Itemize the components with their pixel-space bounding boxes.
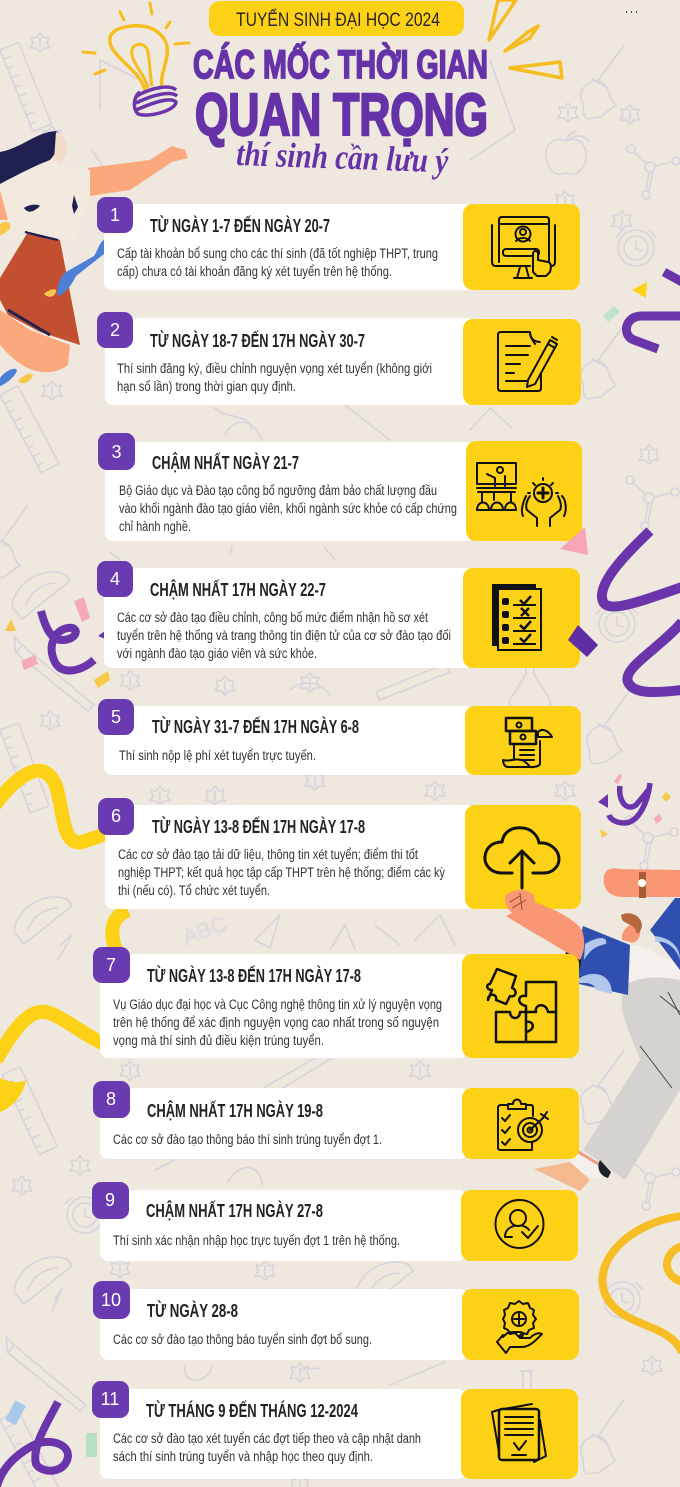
decoration: shapes — [5, 282, 671, 1457]
badge 3: 3 — [111, 442, 122, 462]
badge 4 — [97, 561, 133, 597]
skirt — [0, 232, 80, 345]
text 6: nghiệp THPT; kết quả học tập cấp THPT trên hệ thống; điểm các kỳ — [118, 865, 445, 880]
badge 10 — [93, 1281, 130, 1319]
text 11: Các cơ sở đào tạo xét tuyển các đợt tiếp theo và cập nhật danh — [113, 1431, 421, 1446]
right hand — [604, 868, 680, 897]
icon: money receipt — [503, 718, 552, 767]
hem marks — [24, 195, 78, 214]
yellow spot — [0, 222, 10, 236]
top dots — [626, 11, 637, 13]
heading 7: TỪ NGÀY 13-8 ĐẾN 17H NGÀY 17-8 — [147, 965, 361, 986]
text 1 — [117, 246, 438, 279]
text 8: Các cơ sở đào tạo thông báo thí sinh trúng tuyển đợt 1. — [113, 1132, 382, 1147]
icon: user check — [496, 1200, 544, 1248]
text 7: trên hệ thống để xác định nguyện vọng cao nhất trong số nguyện — [113, 1015, 439, 1030]
text 9: Thí sinh xác nhận nhập học trực tuyến đợt 1 trên hệ thống. — [113, 1233, 400, 1248]
heading 3: CHẬM NHẤT NGÀY 21-7 — [152, 452, 299, 473]
card 3 — [98, 433, 582, 541]
shirt — [0, 158, 90, 240]
card 9 — [92, 1182, 578, 1261]
icon: documents — [492, 1404, 546, 1462]
text 4: Các cơ sở đào tạo điều chỉnh, công bố mức điểm nhận hồ sơ xét — [117, 610, 428, 625]
arm — [88, 146, 188, 196]
left leg — [0, 310, 70, 372]
badge 11 — [92, 1381, 129, 1418]
card 10 — [93, 1281, 579, 1360]
face — [54, 132, 67, 165]
badge 7 — [93, 947, 130, 983]
heading 1: TỪ NGÀY 1-7 ĐẾN NGÀY 20-7 — [150, 215, 330, 236]
icon: document and pen — [498, 332, 557, 391]
text 3 — [119, 483, 457, 534]
icon: gear and hand — [497, 1301, 542, 1353]
heading 10: TỪ NGÀY 28-8 — [147, 1300, 238, 1321]
arm shade — [0, 190, 8, 220]
decoration: yellow strokes top right — [489, 0, 562, 78]
icon: puzzle — [487, 969, 556, 1042]
heading 2: TỪ NGÀY 18-7 ĐẾN 17H NGÀY 30-7 — [150, 330, 365, 351]
text 5: Thí sinh nộp lệ phí xét tuyển trực tuyến. — [119, 748, 316, 763]
text 2 — [117, 361, 432, 394]
text 4 — [117, 610, 451, 661]
text 1: Cấp tài khoản bổ sung cho các thí sinh (đã tốt nghiệp THPT, trung — [117, 246, 438, 261]
background doodles: ABC — [179, 911, 230, 950]
icon: light bulb — [83, 3, 189, 115]
sleeve — [565, 950, 581, 983]
subtitle pill — [209, 1, 464, 36]
decoration: purple squiggle left — [41, 611, 94, 671]
pink triangle — [560, 527, 588, 555]
badge 8 — [93, 1081, 130, 1118]
badge 7: 7 — [106, 955, 116, 975]
card 7 — [93, 947, 579, 1058]
heading 6: TỪ NGÀY 13-8 ĐẾN 17H NGÀY 17-8 — [152, 816, 365, 837]
text 3: Bộ Giáo dục và Đào tạo công bố ngưỡng đảm bảo chất lượng đầu — [119, 483, 437, 498]
heading 9: CHẬM NHẤT 17H NGÀY 27-8 — [146, 1200, 323, 1221]
decoration: purple squiggle right small — [609, 783, 650, 823]
text 4: với ngành đào tạo giáo viên và sức khỏe. — [117, 646, 317, 661]
text 4: tuyển trên hệ thống và trang thông tin điện tử của cơ sở đào tạo đối — [117, 628, 451, 643]
sock — [570, 1148, 605, 1180]
text 6: Các cơ sở đào tạo tải dữ liệu, thông tin xét tuyển; điểm thi tốt — [118, 847, 418, 862]
icon: login screen — [492, 217, 555, 278]
card 2 — [97, 312, 581, 405]
text 2: Thí sinh đăng ký, điều chỉnh nguyện vọng xét tuyển (không giới — [117, 361, 432, 376]
badge 11: 11 — [101, 1389, 119, 1409]
badge 4: 4 — [110, 569, 120, 589]
badge 3 — [98, 433, 135, 470]
text 7: vọng mà thí sinh đủ điều kiện trúng tuyển. — [113, 1033, 324, 1048]
card 8 — [93, 1081, 579, 1159]
decoration: yellow squiggle lower left — [0, 1012, 104, 1060]
text 2: hạn số lần) trong thời gian quy định. — [117, 379, 296, 394]
title line 1: CÁC MỐC THỜI GIAN — [193, 41, 488, 87]
badge 1: 1 — [110, 205, 120, 225]
header — [193, 1, 488, 180]
shoe — [534, 1162, 590, 1191]
fist — [505, 890, 535, 918]
heading 11: TỪ THÁNG 9 ĐẾN THÁNG 12-2024 — [146, 1400, 358, 1421]
text 6: thi (nếu có). Tổ chức xét tuyển. — [118, 883, 270, 898]
card 11 — [92, 1381, 578, 1479]
icon: checklist — [492, 584, 541, 650]
badge 9: 9 — [105, 1190, 115, 1210]
heading 8: CHẬM NHẤT 17H NGÀY 19-8 — [147, 1100, 323, 1121]
character: woman pointing — [0, 131, 188, 386]
text 10: Các cơ sở đào tạo thông báo tuyển sinh đợt bổ sung. — [113, 1332, 372, 1347]
badge 10: 10 — [101, 1290, 121, 1310]
subtitle pill: TUYỂN SINH ĐẠI HỌC 2024 — [236, 9, 440, 31]
badge 6 — [98, 798, 134, 835]
icon: classroom and medical hands — [477, 463, 566, 526]
heading 5: TỪ NGÀY 31-7 ĐẾN 17H NGÀY 6-8 — [152, 716, 359, 737]
icon: clipboard and target — [498, 1100, 548, 1150]
badge 5 — [98, 699, 134, 735]
arm — [506, 902, 584, 960]
trousers — [583, 977, 680, 1180]
decoration: purple squiggle right — [602, 531, 680, 692]
small pen — [0, 369, 17, 386]
text 3: chỉ hành nghề. — [119, 519, 191, 534]
watch — [638, 872, 646, 898]
shirt — [608, 945, 680, 985]
text 11 — [113, 1431, 421, 1464]
blue pen — [57, 238, 109, 296]
decoration: yellow ring right — [602, 1216, 680, 1352]
text 11: sách thí sinh trúng tuyển và nhập học theo quy định. — [113, 1449, 373, 1464]
purple bar — [568, 625, 598, 657]
icon: cloud upload — [485, 828, 559, 888]
decoration: yellow squiggle under card 6 — [112, 910, 128, 954]
text 3: vào khối ngành đào tạo giáo viên, khối ngành sức khỏe có cấp chứng — [119, 501, 457, 516]
card 5 — [98, 699, 581, 775]
card 1 — [97, 197, 580, 290]
card 6 — [98, 798, 581, 909]
card 4 — [97, 561, 580, 668]
title line 3: thí sinh cần lưu ý — [236, 134, 449, 180]
decoration: yellow blob left — [0, 1078, 26, 1112]
badge 8: 8 — [106, 1089, 116, 1109]
badge 9 — [92, 1182, 129, 1219]
character: man jumping — [505, 868, 680, 1191]
decoration: yellow squiggle left — [0, 771, 106, 842]
text 7 — [113, 997, 442, 1048]
badge 2: 2 — [110, 320, 120, 340]
heading 4: CHẬM NHẤT 17H NGÀY 22-7 — [150, 579, 326, 600]
decoration: purple loop bottom left — [0, 1402, 68, 1487]
decoration: purple squiggle right upper — [626, 272, 680, 349]
badge 2 — [97, 312, 133, 348]
hair — [0, 131, 60, 184]
head — [621, 913, 642, 943]
badge 6: 6 — [111, 806, 121, 826]
badge 5: 5 — [111, 707, 121, 727]
text 7: Vụ Giáo dục đại học và Cục Công nghệ thông tin xử lý nguyện vọng — [113, 997, 442, 1012]
text 1: cấp) chưa có tài khoản đăng ký xét tuyển trên hệ thống. — [117, 264, 392, 279]
text 6 — [118, 847, 445, 898]
badge 1 — [97, 197, 133, 233]
title line 2: QUAN TRỌNG — [195, 82, 488, 148]
